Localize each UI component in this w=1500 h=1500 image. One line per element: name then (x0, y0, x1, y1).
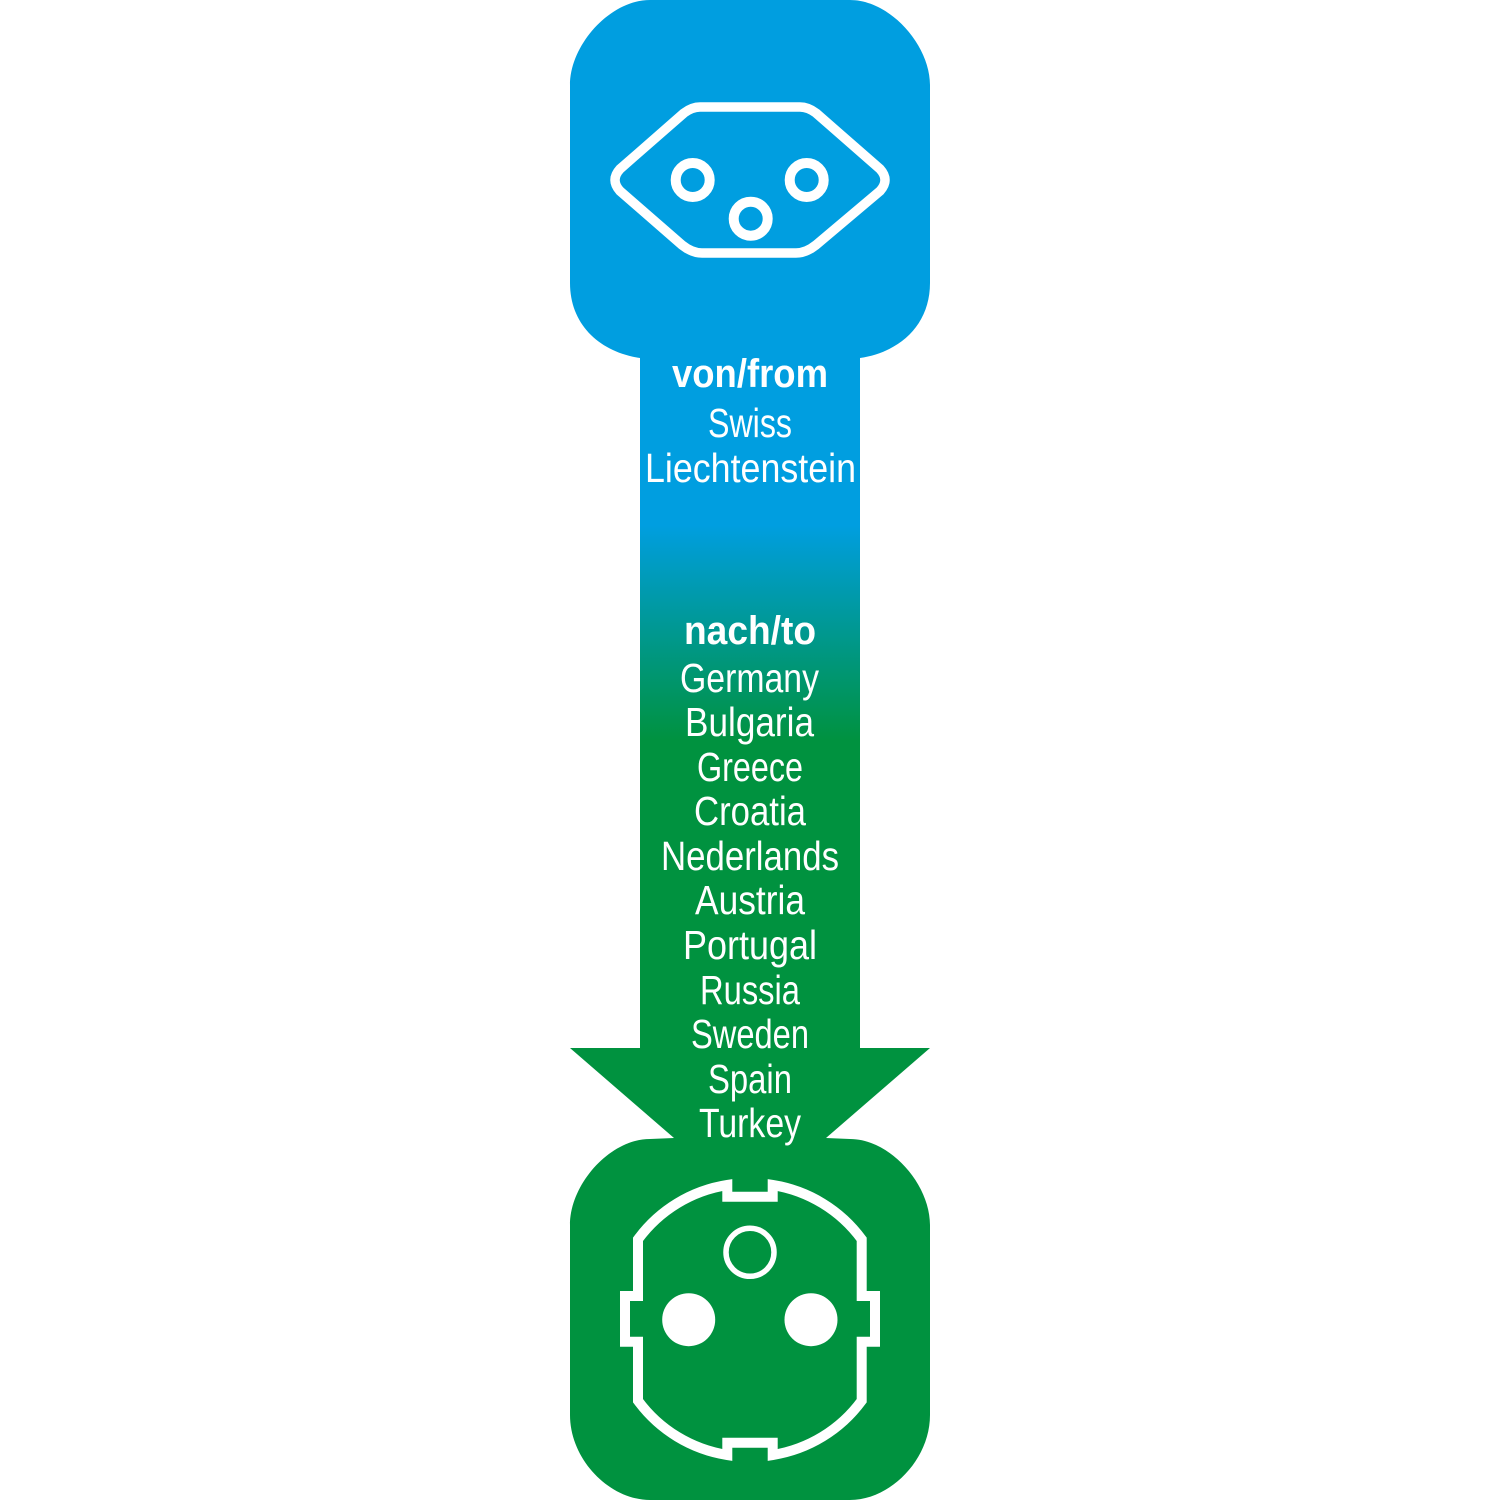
label: Austria: Austria (695, 877, 805, 923)
label: Croatia: Croatia (694, 788, 806, 834)
label: Portugal: Portugal (683, 922, 817, 968)
text block: from countries (645, 352, 856, 491)
label: Swiss: Swiss (708, 400, 792, 446)
icon: European Schuko socket (625, 1185, 875, 1455)
label: Germany: Germany (680, 655, 819, 701)
label: Nederlands: Nederlands (661, 833, 839, 879)
heading: von/from: von/from (672, 352, 828, 396)
label: Greece: Greece (697, 744, 803, 790)
text block: to countries (661, 609, 839, 1146)
label: Bulgaria: Bulgaria (685, 699, 814, 745)
label: Liechtenstein: Liechtenstein (645, 445, 856, 491)
icon: Swiss type J socket (615, 107, 885, 253)
arrow: blue-to-green body joining source and destination tiles (570, 0, 930, 1500)
label: Spain: Spain (708, 1056, 792, 1102)
label: Sweden: Sweden (691, 1011, 809, 1057)
label: Russia: Russia (700, 967, 800, 1013)
heading: nach/to: nach/to (684, 609, 816, 653)
label: Turkey: Turkey (699, 1100, 801, 1146)
